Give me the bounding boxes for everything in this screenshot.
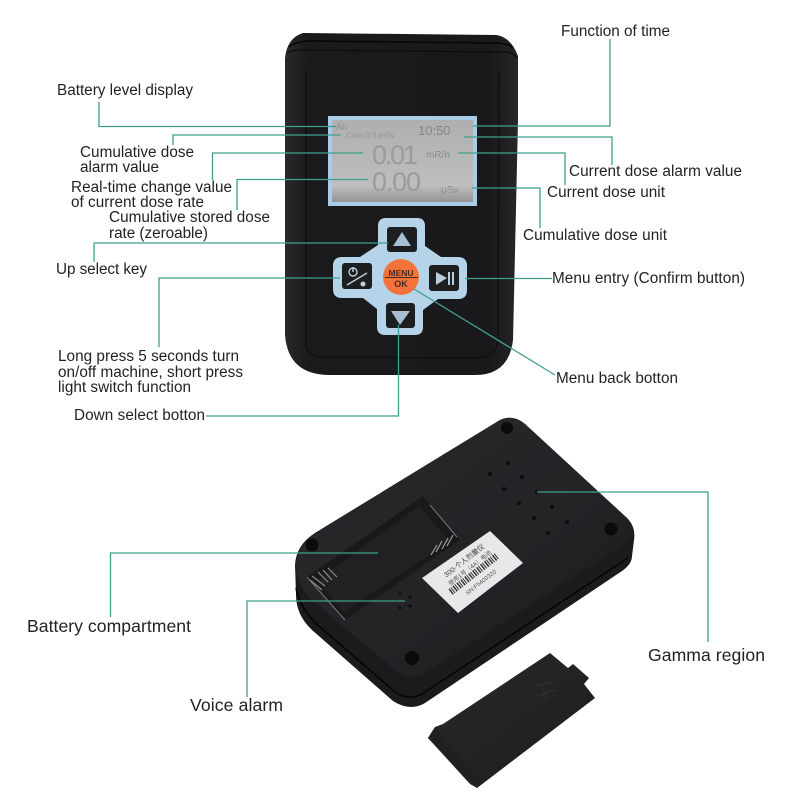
label: real-time change value <box>71 179 232 211</box>
barcode label: 300-个人剂量仪 <box>442 542 486 579</box>
battery cover <box>428 653 595 788</box>
label: cumulative dose unit: Cumulative dose unit <box>523 227 668 244</box>
screw holes <box>306 422 618 665</box>
label: battery compartment: Battery compartment <box>27 616 191 636</box>
keypad <box>333 218 467 335</box>
LCD screen: mR/h <box>426 150 450 161</box>
label: cumulative dose alarm value <box>80 144 194 176</box>
label: cumulative stored dose rate: Cumulative stored dose <box>109 209 270 226</box>
menu ok button: MENU <box>388 268 414 278</box>
play pause key <box>429 265 459 291</box>
leader line: cumulative dose alarm value <box>173 135 341 145</box>
label: voice alarm: Voice alarm <box>190 695 283 715</box>
LCD screen: μSv <box>441 185 458 196</box>
power key <box>342 263 372 289</box>
label: cumulative stored dose rate <box>109 209 270 242</box>
label: power key function: on/off machine, short press <box>58 364 243 381</box>
barcode label: SN:F5400320 <box>465 569 499 597</box>
label: real-time change value: of current dose rate <box>71 194 204 211</box>
leader line: battery level display <box>99 102 336 126</box>
label: menu entry: Menu entry (Confirm button) <box>552 270 745 287</box>
barcode label: 使用1号（4A）电池 <box>447 549 493 587</box>
leader line: down select button <box>206 325 398 416</box>
leader line: power key <box>159 278 340 347</box>
leader line: up select key <box>94 243 388 262</box>
label: menu back button: Menu back botton <box>556 370 678 387</box>
leader line: current dose alarm value <box>464 137 612 165</box>
rear case side <box>295 418 634 707</box>
label: current dose alarm value: Current dose alarm value <box>569 163 742 180</box>
LCD screen: 10:50 <box>418 123 451 138</box>
label: real-time change value: Real-time change value <box>71 179 232 196</box>
label: power key function: light switch function <box>58 379 191 396</box>
label: cumulative dose alarm value: alarm value <box>80 159 159 176</box>
LCD screen: 0.00 <box>372 167 421 197</box>
leader line: function of time <box>473 39 610 126</box>
label: power key function <box>58 348 243 396</box>
leader line: battery compartment <box>110 553 378 617</box>
device body <box>285 33 518 375</box>
label: gamma region: Gamma region <box>648 645 765 665</box>
front view of device <box>285 33 518 375</box>
LCD screen: 0.01 <box>372 140 418 170</box>
barcode label <box>422 531 523 613</box>
label: up select key: Up select key <box>56 261 147 278</box>
leader line: voice alarm <box>247 601 405 697</box>
voice alarm holes <box>399 593 411 609</box>
leader line: menu back button <box>414 289 555 375</box>
label: cumulative dose alarm value: Cumulative dose <box>80 144 194 161</box>
down key <box>386 303 415 328</box>
label: down select button: Down select botton <box>74 407 205 424</box>
up key <box>387 227 417 252</box>
leader line: real-time change value <box>212 153 363 180</box>
leader line: cumulative stored dose rate <box>237 180 368 210</box>
LCD screen <box>329 117 476 205</box>
label: battery level display: Battery level display <box>57 82 193 99</box>
label: power key function: Long press 5 seconds turn <box>58 348 239 365</box>
battery compartment <box>307 496 460 620</box>
leader line: cumulative dose unit <box>472 188 540 228</box>
leader line: gamma region <box>537 492 708 642</box>
leader line: menu entry <box>465 278 552 280</box>
menu ok button: OK <box>394 279 408 289</box>
label: current dose unit: Current dose unit <box>547 184 666 201</box>
menu ok button <box>383 259 419 295</box>
label: cumulative stored dose rate: rate (zeroable) <box>109 225 208 242</box>
rear view of device <box>295 418 634 707</box>
gamma region holes <box>488 461 569 535</box>
label: function of time: Function of time <box>561 23 670 40</box>
LCD screen: Ah <box>336 122 347 132</box>
LCD screen: .Cum 0.0 mSv <box>344 131 395 140</box>
rear case top face <box>296 418 632 677</box>
leader line: current dose unit <box>458 153 565 185</box>
